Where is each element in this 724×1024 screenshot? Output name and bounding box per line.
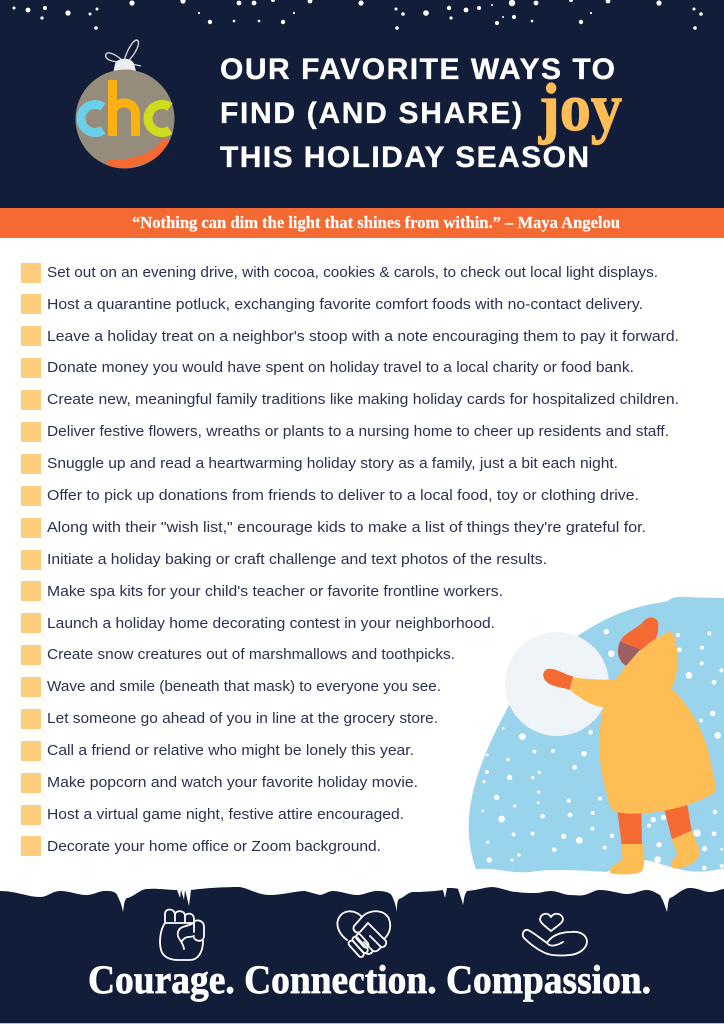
list item 9: Along with their "wish list," encourage kids to make a list of things they're grateful for.: [47, 519, 646, 536]
list item 6: Deliver festive flowers, wreaths or plants to a nursing home to cheer up residents and staff.: [47, 423, 669, 440]
back leg: [664, 805, 692, 839]
raincoat: [570, 632, 716, 814]
list item 17: Make popcorn and watch your favorite holiday movie.: [47, 774, 418, 791]
header panel: [0, 0, 724, 208]
ornament ribbon: [106, 40, 141, 66]
logo letter c blue: [81, 105, 103, 133]
falling snow: [481, 629, 724, 870]
icon: hand holding heart: [523, 914, 587, 956]
list item 13: Create snow creatures out of marshmallows and toothpicks.: [47, 646, 455, 663]
face: [618, 642, 640, 666]
list item 8: Offer to pick up donations from friends to deliver to a local food, toy or clothing drive.: [47, 487, 639, 504]
list item 10: Initiate a holiday baking or craft challenge and text photos of the results.: [47, 551, 547, 568]
snowball: [505, 632, 609, 736]
list item 7: Snuggle up and read a heartwarming holiday story as a family, just a bit each night.: [47, 455, 618, 472]
title: THIS HOLIDAY SEASON: [220, 141, 589, 174]
joy accent word: joy: [538, 69, 622, 145]
footer tagline: Courage. Connection. Compassion.: [88, 957, 651, 1002]
title: FIND (AND SHARE): [220, 97, 522, 130]
list item 3: Leave a holiday treat on a neighbor's stoop with a note encouraging them to pay it forward.: [47, 328, 679, 345]
checklist: [21, 263, 679, 856]
logo letter h: [112, 80, 136, 136]
hat: [620, 618, 658, 652]
ornament cap: [113, 59, 137, 74]
list item 1: Set out on an evening drive, with cocoa, cookies & carols, to check out local light displays.: [47, 264, 658, 281]
snowy blue backdrop: [469, 597, 724, 872]
handshake fingers: [347, 940, 365, 958]
list item 15: Let someone go ahead of you in line at the grocery store.: [47, 710, 438, 727]
list item 19: Decorate your home office or Zoom background.: [47, 838, 381, 855]
logo smile: [108, 140, 168, 164]
front leg: [617, 810, 642, 845]
list item 5: Create new, meaningful family traditions like making holiday cards for hospitalized children.: [47, 391, 679, 408]
list item 2: Host a quarantine potluck, exchanging favorite comfort foods with no-contact delivery.: [47, 296, 643, 313]
title: [220, 53, 615, 174]
logo ornament: [76, 40, 174, 168]
ornament ball: [76, 70, 174, 168]
quote text: “Nothing can dim the light that shines from within.” – Maya Angelou: [132, 213, 620, 232]
title: OUR FAVORITE WAYS TO: [220, 53, 615, 86]
list item 12: Launch a holiday home decorating contest in your neighborhood.: [47, 615, 495, 632]
illustration: child rolling snowball: [469, 597, 724, 874]
list item 14: Wave and smile (beneath that mask) to everyone you see.: [47, 678, 441, 695]
front boot: [610, 844, 644, 874]
icon: fist: [160, 910, 204, 960]
snow stars along the top: [12, 0, 703, 30]
logo letter c lime: [148, 105, 170, 133]
icon: heart handshake: [337, 911, 390, 958]
list item 4: Donate money you would have spent on holiday travel to a local charity or food bank.: [47, 359, 634, 376]
list item 18: Host a virtual game night, festive attire encouraged.: [47, 806, 404, 823]
mitten: [543, 669, 573, 690]
list item 11: Make spa kits for your child's teacher or favorite frontline workers.: [47, 583, 503, 600]
quote banner: [0, 208, 724, 238]
back boot: [671, 831, 699, 869]
footer panel: [0, 887, 724, 1024]
list item 16: Call a friend or relative who might be lonely this year.: [47, 742, 414, 759]
